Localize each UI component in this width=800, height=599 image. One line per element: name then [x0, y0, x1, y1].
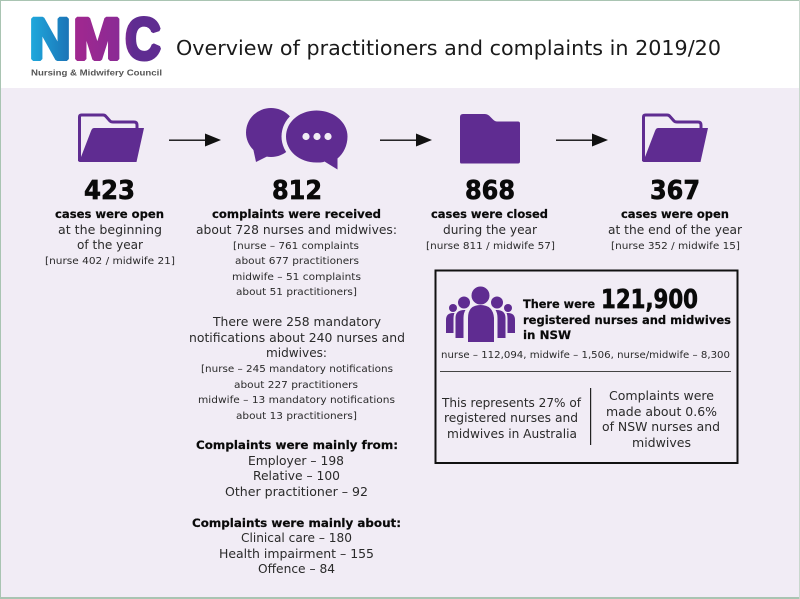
- complaints mainly from: Employer – 198: [248, 454, 344, 468]
- heading: 121,900 registered: 121,900: [601, 285, 698, 315]
- icon: speech bubbles: [246, 106, 352, 170]
- heading: 121,900 registered: in NSW: [523, 328, 571, 342]
- logo: NMC: Nursing & Midwifery Council: [31, 68, 162, 78]
- complaints mainly from: Complaints were mainly from:: [196, 438, 398, 452]
- column: cases closed: [nurse 811 / midwife 57]: [426, 241, 555, 252]
- text: complaints share: Complaints were: [609, 389, 714, 403]
- column: complaints received: [nurse – 761 complaints: [233, 241, 359, 252]
- heading: 121,900 registered: [523, 285, 731, 342]
- icon: group of people: [446, 286, 515, 342]
- column: cases open at end: cases were open: [621, 207, 729, 221]
- text: complaints share: of NSW nurses and: [602, 420, 720, 434]
- complaints mainly about: Health impairment – 155: [219, 547, 374, 561]
- logo: NMC: N: [29, 7, 71, 72]
- text: share of Australia: registered nurses and: [444, 411, 578, 425]
- column: cases open at start: 423: [84, 176, 135, 206]
- column: cases open at end: at the end of the year: [608, 223, 743, 237]
- column: complaints received: [196, 176, 397, 298]
- logo: NMC: C: [125, 7, 161, 72]
- mandatory notifications text: about 227 practitioners: [234, 380, 358, 391]
- complaints mainly from: [196, 438, 398, 499]
- text: share of Australia: This represents 27% of: [441, 396, 582, 410]
- mandatory notifications text: [nurse – 245 mandatory notifications: [201, 364, 393, 375]
- column: cases open at start: cases were open: [55, 207, 164, 221]
- logo: NMC: M: [73, 7, 121, 72]
- column: cases closed: 868: [465, 176, 515, 206]
- text: complaints share: midwives: [632, 436, 691, 450]
- title: Overview of practitioners and complaints in 2019/20: [176, 36, 721, 60]
- column: complaints received: about 677 practitioners: [235, 256, 359, 267]
- mandatory notifications text: midwives:: [266, 346, 327, 360]
- mandatory notifications text: There were 258 mandatory: [212, 315, 381, 329]
- text: share of Australia: midwives in Australia: [447, 427, 577, 441]
- column: cases closed: during the year: [443, 223, 538, 237]
- column: complaints received: midwife – 51 complaints: [232, 272, 361, 283]
- complaints mainly about: [192, 516, 401, 576]
- logo: NMC: [29, 7, 162, 78]
- panel: registered practitioners: [436, 270, 738, 463]
- column: cases open at start: [nurse 402 / midwife 21]: [45, 256, 175, 267]
- complaints mainly about: Offence – 84: [258, 562, 335, 576]
- icon: closed folder: [460, 114, 520, 164]
- column: cases open at start: of the year: [77, 238, 144, 252]
- icon: open folder: [78, 115, 144, 162]
- text: complaints share: made about 0.6%: [606, 405, 717, 419]
- column: cases closed: [426, 176, 555, 252]
- column: cases closed: cases were closed: [431, 207, 548, 221]
- complaints mainly about: Complaints were mainly about:: [192, 516, 401, 530]
- complaints mainly from: Relative – 100: [253, 469, 340, 483]
- arrow 3: [556, 134, 608, 146]
- mandatory notifications text: notifications about 240 nurses and: [189, 331, 405, 345]
- column: complaints received: complaints were received: [212, 207, 381, 221]
- arrow 2: [380, 134, 432, 146]
- mandatory notifications text: midwife – 13 mandatory notifications: [198, 395, 395, 406]
- column: complaints received: 812: [272, 176, 322, 206]
- column: cases open at end: [nurse 352 / midwife 15]: [611, 241, 740, 252]
- text: share of Australia: [441, 396, 582, 441]
- icon: open folder end: [642, 115, 708, 162]
- complaints mainly from: Other practitioner – 92: [225, 485, 368, 499]
- column: cases open at end: 367: [650, 176, 700, 206]
- breakdown line: nurse – 112,094, midwife – 1,506, nurse/midwife – 8,300: [441, 350, 730, 361]
- heading: 121,900 registered: registered nurses and midwives: [523, 313, 731, 327]
- column: cases open at start: [45, 176, 175, 267]
- complaints mainly about: Clinical care – 180: [241, 531, 352, 545]
- text: complaints share: [602, 389, 720, 450]
- column: complaints received: about 728 nurses and midwives:: [196, 223, 397, 237]
- column: complaints received: about 51 practitioners]: [236, 287, 357, 298]
- column: cases open at end: [608, 176, 743, 252]
- column: cases open at start: at the beginning: [58, 223, 162, 237]
- mandatory notifications text: about 13 practitioners]: [236, 411, 357, 422]
- arrow 1: [169, 134, 221, 146]
- heading: 121,900 registered: There were: [523, 297, 595, 311]
- mandatory notifications text: [189, 315, 405, 422]
